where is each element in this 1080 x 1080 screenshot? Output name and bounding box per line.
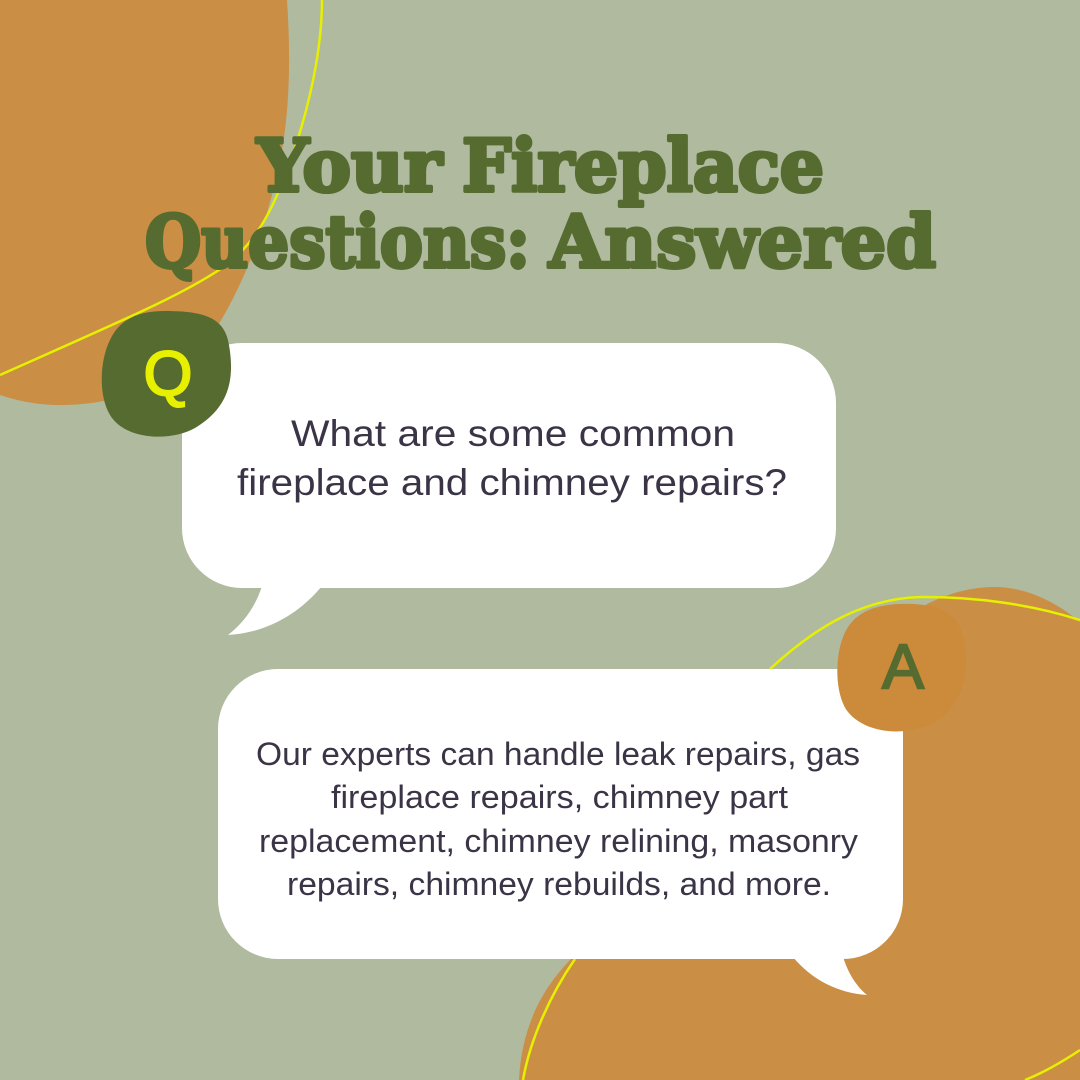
question text (237, 413, 787, 503)
bubble tail: question (228, 586, 322, 635)
blob: bottom-right orange (519, 587, 1080, 1080)
panel: answer speech bubble (218, 669, 903, 995)
blob: top-left orange (0, 0, 289, 405)
title: Answered (548, 199, 936, 284)
icon: A badge (837, 604, 966, 731)
icon: Q badge: Q (143, 339, 193, 409)
answer text: Our experts can handle leak repairs, gas (256, 736, 860, 772)
bubble body: answer (218, 669, 903, 959)
curve: bottom-right yellow line (523, 597, 1080, 1080)
answer text: fireplace repairs, chimney part (331, 779, 788, 815)
icon: Q badge (102, 311, 231, 437)
question text: fireplace and chimney repairs? (237, 462, 787, 503)
answer text: repairs, chimney rebuilds, and more. (287, 866, 831, 902)
panel: question speech bubble (182, 343, 836, 635)
icon: A badge: A (882, 632, 924, 702)
title (145, 123, 936, 284)
answer text: replacement, chimney relining, masonry (259, 823, 858, 859)
curve: top-left yellow line (0, 0, 322, 375)
title: Fireplace (462, 123, 824, 208)
bubble tail: answer (793, 957, 867, 995)
title: Your (256, 123, 443, 208)
bubble body: question (182, 343, 836, 588)
title: Questions: (145, 199, 530, 284)
answer text (256, 736, 860, 902)
question text: What are some common (291, 413, 735, 454)
